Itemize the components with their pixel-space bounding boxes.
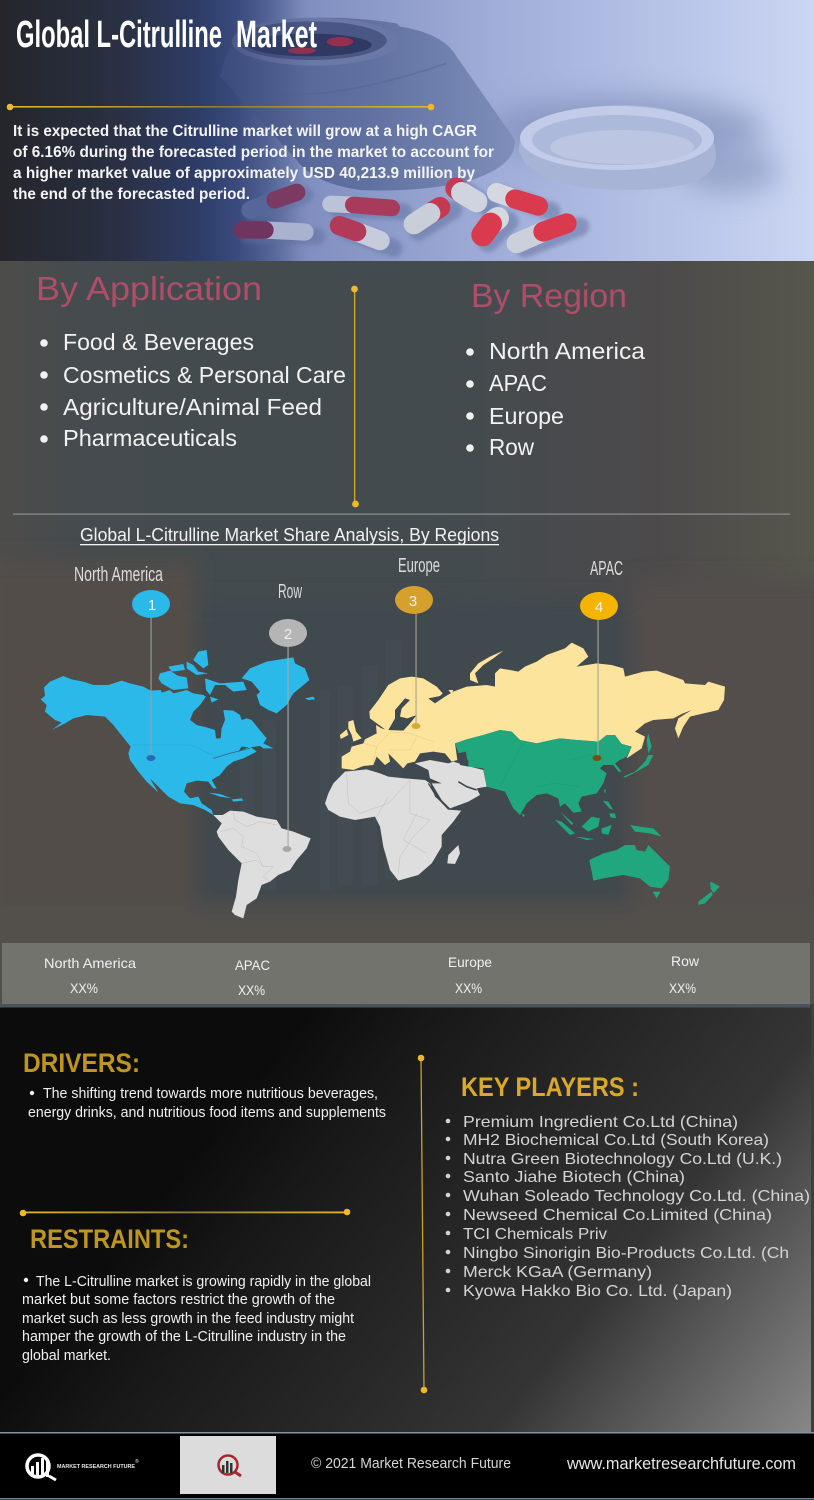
callout: North America marker: North America xyxy=(74,564,164,586)
map: Africa and Middle East xyxy=(325,760,487,881)
list: key players: Merck KGaA (Germany) xyxy=(463,1264,652,1281)
stat: APAC xyxy=(235,957,270,998)
callout: North America marker: 1 xyxy=(148,597,156,614)
list: applications: Pharmaceuticals xyxy=(63,425,237,451)
callout: Europe marker: Europe xyxy=(398,555,440,577)
list: key players: Newseed Chemical Co.Limited (China) xyxy=(463,1207,772,1224)
callout: Europe marker xyxy=(395,555,440,729)
list: key players xyxy=(446,1114,810,1300)
logo: Market Research Future white: ® xyxy=(135,1458,139,1465)
footer xyxy=(0,1432,814,1500)
website: www.marketresearchfuture.com xyxy=(566,1454,796,1473)
stat: APAC: XX% xyxy=(238,982,265,998)
logo: Market Research Future white xyxy=(27,1455,139,1480)
logo: gray box xyxy=(180,1436,276,1494)
callout: Row marker: 2 xyxy=(284,626,292,643)
list: regions xyxy=(466,338,646,460)
list: applications: Food & Beverages xyxy=(63,329,254,355)
text block: restraints: hamper the growth of the L-Citrulline industry in the xyxy=(22,1329,346,1345)
stat: North America xyxy=(44,955,136,996)
text block: market summary xyxy=(13,123,494,203)
callout: APAC marker: APAC xyxy=(590,558,623,580)
list: regions: North America xyxy=(489,338,646,364)
stat: Europe: Europe xyxy=(448,954,492,970)
text block: market summary: of 6.16% during the forecasted period in the market to account for xyxy=(13,144,494,161)
text block: restraints: market but some factors restrict the growth of the xyxy=(22,1292,335,1308)
list: applications: Cosmetics & Personal Care xyxy=(63,362,346,388)
text block: market summary: It is expected that the Citrulline market will grow at a high CAGR xyxy=(13,123,477,140)
stat: Row xyxy=(669,953,700,996)
divider: key players gold line xyxy=(418,1055,427,1393)
list: key players: Ningbo Sinorigin Bio-Products Co.Ltd. (Ch xyxy=(463,1245,789,1262)
illustration: capsules xyxy=(242,188,580,248)
callout: APAC marker: 4 xyxy=(595,599,603,616)
panel: regional share table xyxy=(2,943,810,1004)
callout: APAC marker xyxy=(580,558,623,761)
world map xyxy=(41,643,725,918)
logo: Market Research Future white: MARKET RESEARCH FUTURE xyxy=(57,1464,136,1470)
stat: Row: Row xyxy=(671,953,700,969)
map: Asia Pacific xyxy=(455,730,720,905)
text block: restraints: global market. xyxy=(22,1348,111,1364)
list: key players: TCI Chemicals Priv xyxy=(463,1226,607,1243)
list: regions: Row xyxy=(489,434,535,460)
stat: APAC: APAC xyxy=(235,957,270,973)
text block: restraints: market such as less growth in the feed industry might xyxy=(22,1311,354,1327)
heading: restraints: RESTRAINTS: xyxy=(30,1224,189,1254)
illustration: lid xyxy=(519,105,716,190)
list: key players: Kyowa Hakko Bio Co. Ltd. (Japan) xyxy=(463,1283,732,1300)
stat: Europe: XX% xyxy=(455,980,482,996)
divider: hero gold line xyxy=(7,104,434,110)
text block: drivers xyxy=(28,1086,386,1121)
heading: By Application: By Application xyxy=(36,270,262,307)
panel: drivers, restraints and key players background xyxy=(0,1004,814,1434)
heading: key players: KEY PLAYERS : xyxy=(461,1072,639,1102)
list: key players: MH2 Biochemical Co.Ltd (South Korea) xyxy=(463,1132,769,1149)
callout: Europe marker: 3 xyxy=(409,593,417,610)
text block: restraints: The L-Citrulline market is growing rapidly in the global xyxy=(36,1274,371,1290)
map: Americas xyxy=(41,650,315,918)
copyright: © 2021 Market Research Future xyxy=(311,1455,511,1472)
callout: Row marker xyxy=(269,581,307,852)
map: Eurasia, Africa and Oceania xyxy=(325,643,725,905)
heading: map share analysis: Global L-Citrulline Market Share Analysis, By Regions xyxy=(80,525,499,545)
illustration: pill bottle xyxy=(220,18,515,191)
stat: Row: XX% xyxy=(669,980,696,996)
left dark overlay xyxy=(190,0,298,261)
stat: Europe xyxy=(448,954,492,996)
list: key players: Santo Jiahe Biotech (China) xyxy=(463,1169,685,1186)
stat: North America: North America xyxy=(44,955,136,971)
text block: market summary: a higher market value of approximately USD 40,213.9 million by xyxy=(13,165,475,182)
list: key players: Wuhan Soleado Technology Co.Ltd. (China) xyxy=(463,1188,810,1205)
title: Global L-Citrulline xyxy=(16,14,222,56)
list: regions: Europe xyxy=(489,403,564,429)
list: regions: APAC xyxy=(489,370,547,396)
callout: North America marker xyxy=(74,564,170,761)
list: applications: Agriculture/Animal Feed xyxy=(63,394,322,420)
list: applications xyxy=(40,329,346,451)
list: key players: Nutra Green Biotechnology Co.Ltd (U.K.) xyxy=(463,1151,782,1168)
panel: segmentation and map background xyxy=(0,261,814,1015)
heading: By Region: By Region xyxy=(471,277,627,314)
map: Europe and Russia xyxy=(340,643,725,770)
text block: market summary: the end of the forecasted period. xyxy=(13,186,250,203)
panel: hero banner xyxy=(0,0,814,261)
divider: vertical gold line xyxy=(351,286,359,507)
heading: drivers: DRIVERS: xyxy=(23,1048,140,1078)
text block: drivers: energy drinks, and nutritious food items and supplements xyxy=(28,1105,386,1121)
text block: restraints xyxy=(22,1274,371,1364)
text block: drivers: The shifting trend towards more nutritious beverages, xyxy=(43,1086,378,1102)
callout: Row marker: Row xyxy=(278,581,302,603)
divider: restraints gold line xyxy=(20,1209,350,1216)
list: key players: Premium Ingredient Co.Ltd (China) xyxy=(463,1114,738,1131)
title: Market xyxy=(236,14,317,56)
stat: North America: XX% xyxy=(70,980,98,996)
